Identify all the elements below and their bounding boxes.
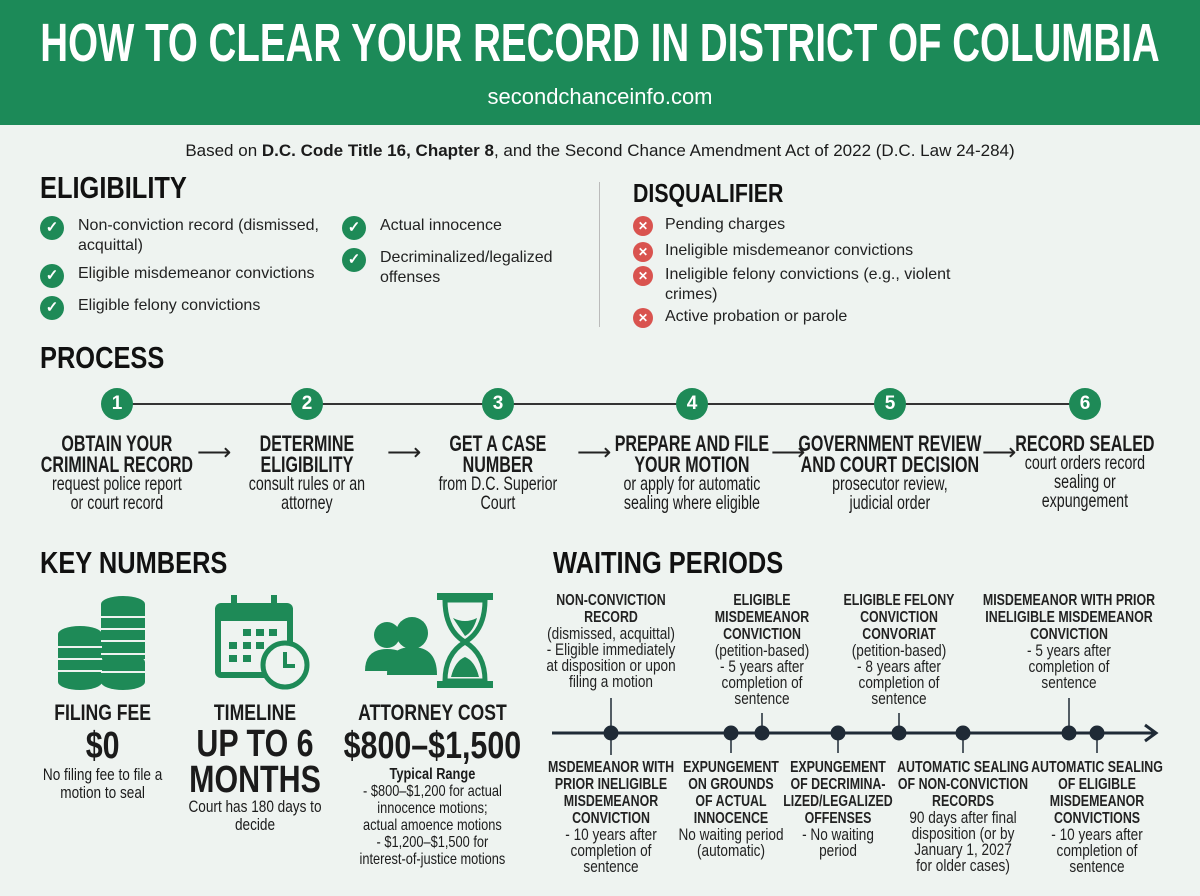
attorney cost stat: actual amoence motions (363, 817, 502, 834)
filing fee stat: FILING FEE (54, 700, 151, 725)
step 5: AND COURT DECISION (801, 452, 979, 477)
wp: decriminalized: period (819, 841, 857, 860)
step 3: from D.C. Superior (439, 473, 557, 495)
wp: misdemeanor prior 5: INELIGIBLE MISDEMEANOR (985, 609, 1153, 626)
step 4: 4 (687, 393, 697, 414)
disqualifier list: ✕ (638, 269, 648, 283)
step 4 (615, 388, 769, 514)
wp: auto non-conviction: AUTOMATIC SEALING (897, 759, 1029, 776)
step 3: Court (480, 492, 515, 514)
attorney cost stat: Typical Range (389, 766, 475, 783)
disqualifier list: Active probation or parole (665, 308, 847, 325)
key numbers heading: KEY NUMBERS (40, 545, 227, 580)
step 6: court orders record (1025, 452, 1145, 474)
process line (117, 403, 1085, 405)
disqualifier list: Ineligible felony convictions (e.g., violent crimes) (665, 266, 950, 303)
disqualifier list: ✕ (638, 219, 648, 233)
disqualifier heading: DISQUALIFIER (633, 178, 783, 208)
wp: eligible felony: sentence (871, 689, 927, 708)
icon: people and hourglass (365, 593, 493, 688)
wp: auto non-conviction: January 1, 2027 (914, 840, 1012, 859)
disqualifier list: Ineligible misdemeanor convictions (665, 242, 913, 259)
eligibility heading: ELIGIBILITY (40, 170, 187, 205)
wp: eligible misdemeanor: completion of (722, 673, 802, 692)
step 2: attorney (281, 492, 333, 514)
icon: calendar (215, 595, 310, 690)
step 1: 1 (112, 393, 122, 414)
arrows (197, 439, 1016, 466)
step 5: 5 (885, 393, 895, 414)
attorney cost stat: innocence motions; (377, 800, 488, 817)
eligibility list: ✓ (348, 219, 360, 236)
step 2: 2 (302, 393, 312, 414)
timeline stat: Court has 180 days to decide (188, 797, 322, 834)
waiting periods timeline (552, 698, 1158, 755)
step 4: sealing where eligible (624, 492, 760, 514)
wp: misdemeanor prior 10: MSDEMEANOR WITH (548, 759, 674, 776)
wp: actual innocence (678, 759, 784, 860)
wp: decriminalized: OFFENSES (805, 810, 871, 827)
step 1: request police report (52, 473, 182, 495)
wp: actual innocence: (automatic) (697, 841, 765, 860)
step 5: prosecutor review, (832, 473, 948, 495)
wp: actual innocence: EXPUNGEMENT (683, 759, 779, 776)
wp: auto non-conviction: OF NON-CONVICTION (898, 776, 1028, 793)
step 3: 3 (493, 393, 503, 414)
disqualifier list: Pending charges (665, 216, 785, 233)
wp: auto misdemeanor: AUTOMATIC SEALING (1031, 759, 1163, 776)
wp: non-conviction: RECORD (584, 609, 638, 626)
timeline stat (188, 700, 322, 834)
wp: misdemeanor prior 10: - 10 years after (565, 825, 657, 844)
eligibility list: Decriminalized/legalized offenses (380, 249, 553, 286)
header banner (0, 0, 1200, 125)
timeline stat: TIMELINE (214, 700, 296, 725)
eligibility list: ✓ (46, 299, 58, 316)
wp: auto misdemeanor: sentence (1069, 857, 1125, 876)
wp: eligible felony: (petition-based) (852, 641, 946, 660)
wp: eligible misdemeanor: ELIGIBLE (733, 592, 791, 609)
wp: misdemeanor prior 5: completion of (1029, 657, 1109, 676)
wp: eligible misdemeanor: (petition-based) (715, 641, 809, 660)
step 6 (1015, 388, 1155, 512)
wp: auto misdemeanor: completion of (1057, 841, 1137, 860)
wp: eligible felony: CONVICTION (860, 609, 938, 626)
eligibility list: Non-conviction record (dismissed, acquittal) (78, 217, 319, 254)
wp: auto misdemeanor: CONVICTIONS (1054, 810, 1140, 827)
waiting periods heading: WAITING PERIODS (553, 545, 783, 580)
wp: eligible misdemeanor: - 5 years after (720, 657, 804, 676)
process heading: PROCESS (40, 340, 164, 375)
wp: misdemeanor prior 10: CONVICTION (572, 810, 650, 827)
wp: decriminalized: - No waiting (802, 825, 874, 844)
disqualifier list: ✕ (638, 311, 648, 325)
step 5 (798, 388, 982, 514)
attorney cost stat: - $800–$1,200 for actual (363, 783, 502, 800)
eligibility list: ✓ (46, 267, 58, 284)
wp: non-conviction: filing a motion (569, 672, 653, 691)
wp: eligible misdemeanor: CONVICTION (723, 626, 801, 643)
wp: auto non-conviction: disposition (or by (912, 824, 1014, 843)
step 1: OBTAIN YOUR (61, 431, 172, 456)
step 5: GOVERNMENT REVIEW (798, 431, 981, 456)
attorney cost stat: interest-of-justice motions (359, 851, 505, 868)
wp: misdemeanor prior 10: completion of (571, 841, 651, 860)
arrows: ⟶ (577, 439, 611, 466)
step 4: or apply for automatic (623, 473, 760, 495)
wp: eligible misdemeanor: sentence (734, 689, 790, 708)
filing fee stat (43, 700, 162, 802)
wp: eligible misdemeanor (715, 592, 809, 708)
attorney cost stat: - $1,200–$1,500 for (377, 834, 488, 851)
arrows: ⟶ (387, 439, 421, 466)
subtitle: Based on D.C. Code Title 16, Chapter 8, and the Second Chance Amendment Act of 2022 (D.C. Law 24-284) (185, 141, 1015, 160)
step 3: GET A CASE (449, 431, 546, 456)
step 1: CRIMINAL RECORD (41, 452, 193, 477)
wp: auto non-conviction: RECORDS (932, 793, 994, 810)
wp: decriminalized: OF DECRIMINA- (790, 776, 886, 793)
wp: misdemeanor prior 10: MISDEMEANOR (564, 793, 658, 810)
eligibility list: ✓ (46, 219, 58, 236)
wp: misdemeanor prior 10: PRIOR INELIGIBLE (555, 776, 667, 793)
step 2: consult rules or an (249, 473, 365, 495)
wp: eligible felony: CONVORIAT (862, 626, 936, 643)
wp: decriminalized (783, 759, 893, 860)
step 3 (438, 388, 557, 514)
attorney cost stat (344, 700, 521, 868)
step 6: RECORD SEALED (1015, 431, 1155, 456)
wp: auto non-conviction: for older cases) (916, 856, 1010, 875)
website: secondchanceinfo.com (487, 84, 713, 109)
wp: auto misdemeanor: OF ELIGIBLE (1058, 776, 1136, 793)
wp: misdemeanor prior 5: MISDEMEANOR WITH PRIOR (983, 592, 1155, 609)
arrows: ⟶ (197, 439, 231, 466)
step 6: 6 (1080, 393, 1090, 414)
step 2 (249, 388, 365, 514)
attorney cost stat: ATTORNEY COST (358, 700, 507, 725)
step 2: ELIGIBILITY (260, 452, 353, 477)
wp: auto misdemeanor: - 10 years after (1051, 825, 1143, 844)
arrows: ⟶ (771, 439, 805, 466)
eligibility list: Eligible felony convictions (78, 297, 260, 314)
disqualifier list (633, 216, 950, 328)
timeline stat: UP TO 6 MONTHS (189, 723, 321, 801)
wp: non-conviction: - Eligible immediately (547, 640, 675, 659)
wp: misdemeanor prior 5: sentence (1041, 673, 1097, 692)
wp: misdemeanor prior 5: CONVICTION (1030, 626, 1108, 643)
step 5: judicial order (850, 492, 930, 514)
step 4: PREPARE AND FILE (615, 431, 769, 456)
step 6: sealing or (1054, 471, 1116, 493)
wp: non-conviction: (dismissed, acquittal) (547, 624, 675, 643)
title: HOW TO CLEAR YOUR RECORD IN DISTRICT OF COLUMBIA (40, 13, 1160, 73)
wp: misdemeanor prior 5 (983, 592, 1155, 692)
eligibility list (40, 216, 553, 320)
filing fee stat: $0 (86, 725, 120, 767)
wp: decriminalized: LIZED/LEGALIZED (783, 793, 893, 810)
attorney cost stat: $800–$1,500 (344, 725, 521, 767)
step 4: YOUR MOTION (634, 452, 749, 477)
step 3: NUMBER (463, 452, 533, 477)
wp: eligible felony: completion of (859, 673, 939, 692)
wp: non-conviction: NON-CONVICTION (556, 592, 666, 609)
icon: coins (58, 596, 145, 690)
wp: eligible misdemeanor: MISDEMEANOR (715, 609, 809, 626)
wp: actual innocence: No waiting period (678, 825, 784, 844)
wp: decriminalized: EXPUNGEMENT (790, 759, 886, 776)
filing fee stat: No filing fee to file a motion to seal (43, 765, 162, 802)
wp: auto non-conviction: 90 days after final (909, 808, 1017, 827)
eligibility list: ✓ (348, 251, 360, 268)
wp: eligible felony: ELIGIBLE FELONY (844, 592, 954, 609)
disqualifier list: ✕ (638, 245, 648, 259)
eligibility list: Actual innocence (380, 217, 502, 234)
eligibility list: Eligible misdemeanor convictions (78, 265, 315, 282)
step 6: expungement (1042, 490, 1128, 512)
wp: misdemeanor prior 10: sentence (583, 857, 639, 876)
step 1: or court record (71, 492, 163, 514)
wp: actual innocence: ON GROUNDS (688, 776, 774, 793)
wp: non-conviction: at disposition or upon (546, 656, 676, 675)
wp: actual innocence: OF ACTUAL (695, 793, 767, 810)
wp: actual innocence: INNOCENCE (694, 810, 768, 827)
wp: non-conviction (546, 592, 676, 691)
wp: eligible felony: - 8 years after (857, 657, 941, 676)
wp: auto misdemeanor (1031, 759, 1163, 876)
wp: eligible felony (844, 592, 954, 708)
wp: misdemeanor prior 10 (548, 759, 674, 876)
step 1 (41, 388, 193, 514)
arrows: ⟶ (982, 439, 1016, 466)
step 2: DETERMINE (260, 431, 354, 456)
wp: auto non-conviction (897, 759, 1029, 875)
wp: misdemeanor prior 5: - 5 years after (1027, 641, 1111, 660)
wp: auto misdemeanor: MISDEMEANOR (1050, 793, 1144, 810)
